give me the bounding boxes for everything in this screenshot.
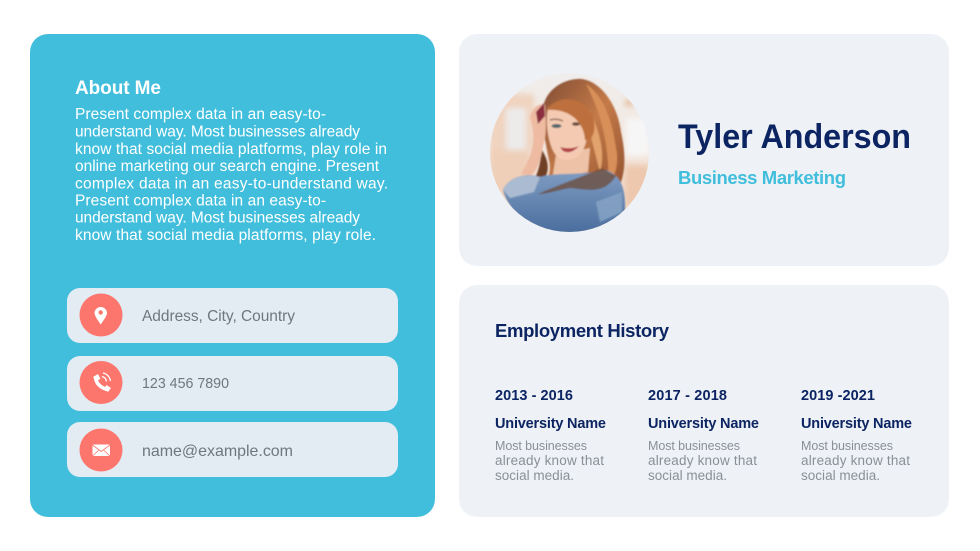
email text: name@example.com [142,443,293,460]
text block: about me body: understand way. Most businesses already [75,210,360,226]
column: 2013-2016: University Name [495,416,606,432]
heading: about me: About Me [75,78,161,99]
panel: about me [30,34,435,517]
text block: about me body [75,106,388,244]
address text: Address, City, Country [142,308,295,325]
contact row: phone [67,356,398,411]
column: 2017-2018 [648,388,759,483]
text block: about me body: know that social media platforms, play role. [75,227,376,244]
column: 2017-2018: Most businesses [648,439,740,453]
column: 2017-2018: University Name [648,416,759,432]
text block: about me body: Present complex data in an easy-to- [75,192,326,210]
text block: about me body: complex data in an easy-to-understand way. [75,176,388,192]
icon: phone [80,361,122,404]
column: 2013-2016 [495,388,606,483]
photo: portrait [490,73,650,233]
heading: employment history: Employment History [495,320,670,341]
column: 2013-2016: social media. [495,468,574,483]
icon: envelope [80,428,122,472]
column: 2019-2021: already know that [801,453,910,468]
hand and arm [521,104,546,176]
panel: employment history [459,285,949,517]
text block: about me body: know that social media platforms, play role in [75,141,387,158]
hair back [543,78,626,183]
text block: about me body: Present complex data in an easy-to- [75,106,326,123]
column: 2019-2021: University Name [801,416,912,432]
face [547,102,587,160]
column: 2017-2018: 2017 - 2018 [648,388,727,404]
eyes and mouth [552,124,562,128]
column: 2017-2018: already know that [648,453,757,468]
text block: about me body: understand way. Most businesses already [75,124,360,140]
column: 2019-2021: social media. [801,468,880,483]
jacket [503,170,625,233]
column: 2013-2016: already know that [495,453,604,468]
phone text: 123 456 7890 [142,375,229,392]
icon: location pin [80,294,122,336]
job title: Business Marketing [678,167,846,188]
hair shadow near neck [535,150,549,178]
column: 2013-2016: Most businesses [495,439,587,453]
panel: profile [459,34,949,266]
column: 2019-2021: 2019 -2021 [801,388,875,404]
contact row: address [67,288,398,343]
text block: about me body: online marketing our search engine. Present [75,158,380,175]
name: Tyler Anderson [678,118,911,156]
column: 2013-2016: 2013 - 2016 [495,388,573,404]
neck [552,148,590,180]
column: 2019-2021 [801,388,912,483]
column: 2017-2018: social media. [648,468,727,483]
column: 2019-2021: Most businesses [801,439,893,453]
contact row: email [67,422,398,477]
